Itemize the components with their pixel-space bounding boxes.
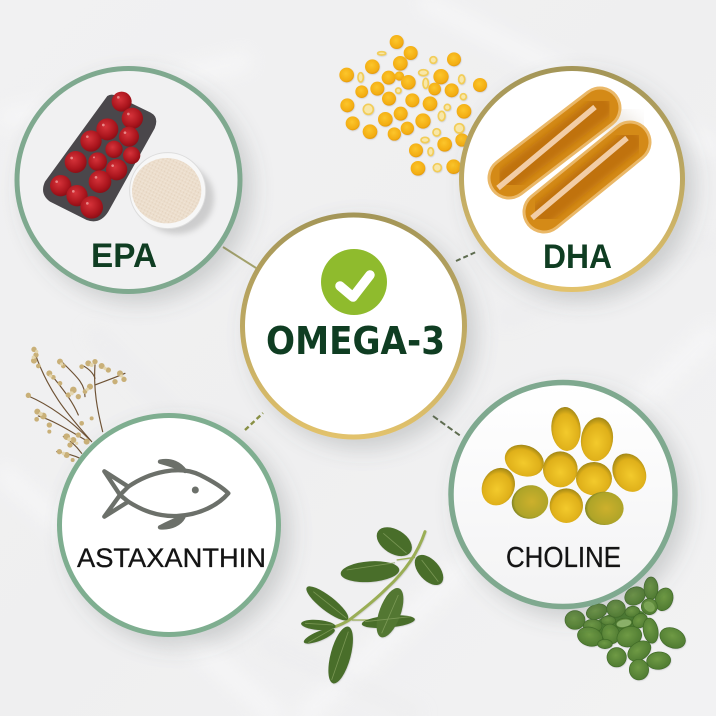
label: CHOLINE: CHOLINE — [506, 542, 621, 574]
connector: CHOLINE to OMEGA-3 — [433, 416, 462, 437]
label: DHA: DHA — [543, 238, 612, 276]
decoration: green leaf sprig — [301, 521, 449, 686]
connector: DHA to OMEGA-3 — [456, 252, 476, 261]
title: OMEGA-3: OMEGA-3 — [266, 319, 445, 363]
panel: DHA — [462, 68, 682, 290]
decoration: green beans — [565, 577, 689, 680]
image: tray of tomatoes and bowl of rice — [43, 92, 214, 234]
connector: ASTAXANTHIN to OMEGA-3 — [245, 413, 263, 430]
label: ASTAXANTHIN: ASTAXANTHIN — [77, 543, 266, 573]
icon: green check badge — [321, 249, 387, 315]
decoration: dried flower sprig — [26, 347, 127, 462]
image: fish oil capsules — [498, 107, 640, 218]
label: EPA: EPA — [91, 237, 157, 275]
icon: fish — [104, 461, 228, 527]
panel: EPA — [17, 68, 240, 292]
panel: ASTAXANTHIN — [60, 416, 278, 634]
image: yellow softgels — [476, 406, 653, 525]
decoration: yellow oil beads — [339, 35, 487, 176]
panel: CHOLINE — [451, 382, 675, 606]
panel: OMEGA-3 center — [242, 215, 464, 437]
connector: EPA to OMEGA-3 — [223, 247, 256, 268]
